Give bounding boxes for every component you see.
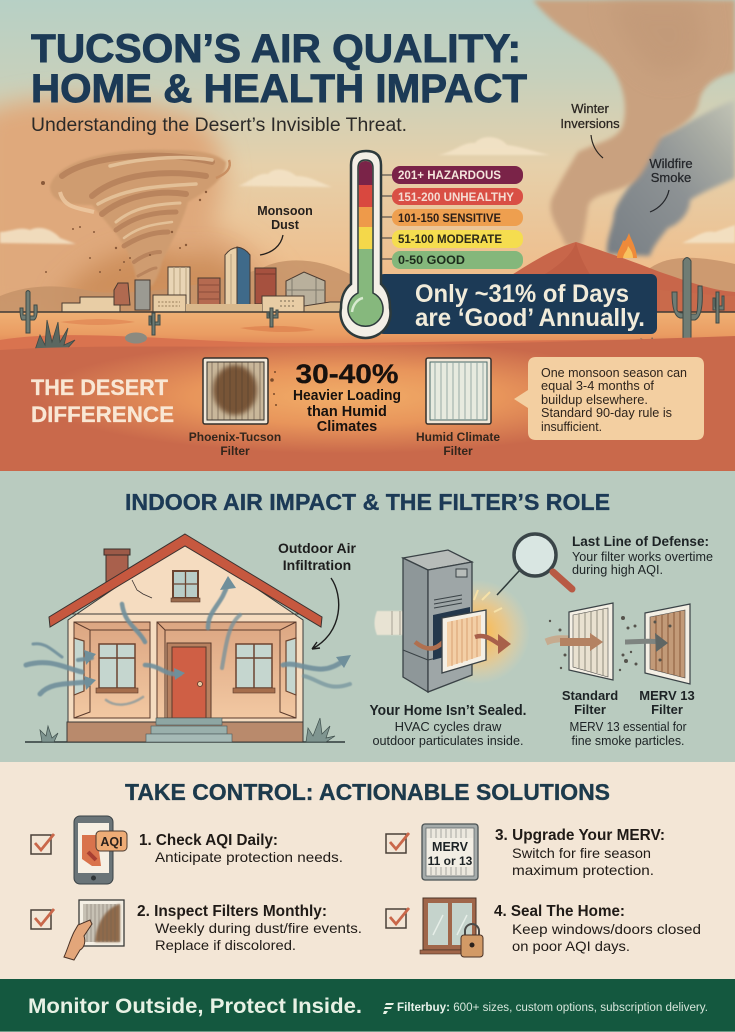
- text: last line of defense: Last Line of Defense:: [572, 533, 709, 549]
- text: upgrade your MERV: [495, 827, 665, 878]
- text: your home isn't sealed: Your Home Isn’t Sealed.: [370, 703, 526, 719]
- icon: MERV filter: 11 or 13: [428, 854, 473, 868]
- stat: 30-40% heavier loading: than Humid: [307, 404, 387, 420]
- panel: take control: [0, 762, 735, 979]
- callout: monsoon season note: buildup elsewhere.: [541, 393, 648, 407]
- label: humid climate filter: Humid Climate: [416, 430, 500, 444]
- label: Phoenix-Tucson filter: [189, 430, 281, 458]
- AQI band: unhealthy: 151-200 UNHEALTHY: [398, 190, 514, 204]
- text: upgrade your MERV: 3. Upgrade Your MERV:: [495, 827, 665, 844]
- solution 4: seal the home: [386, 898, 701, 957]
- AQI scale legend: [392, 166, 523, 269]
- horizon line: [0, 311, 735, 313]
- sky clouds: [0, 137, 735, 244]
- solution 1: check AQI daily: [31, 816, 343, 884]
- footer brand note: Filterbuy: 600+ sizes, custom options, subscription delivery.: [397, 1002, 708, 1014]
- heading: the desert difference: DIFFERENCE: [31, 402, 174, 427]
- text: seal the home: [494, 903, 701, 954]
- text: inspect filters monthly: Replace if discolored.: [155, 937, 296, 953]
- porch windows: [99, 644, 272, 688]
- label: outdoor air infiltration: [278, 540, 357, 649]
- label: wildfire smoke: Smoke: [651, 170, 691, 185]
- stat: 30-40% heavier loading: 30-40%: [296, 359, 398, 389]
- stat: 30-40% heavier loading: Heavier Loading: [293, 388, 401, 404]
- stat: 30-40% heavier loading: [293, 359, 401, 435]
- text: inspect filters monthly: 2. Inspect Filters Monthly:: [137, 903, 327, 920]
- text: your home isn't sealed: outdoor particulates inside.: [372, 733, 524, 748]
- icon: hand holding dirty filter: [64, 900, 124, 960]
- grass: [40, 718, 335, 742]
- stat: 30-40% heavier loading: Climates: [317, 419, 377, 435]
- side windows: [74, 638, 296, 695]
- red mountain: [488, 242, 735, 320]
- label: winter inversions: Inversions: [560, 116, 620, 131]
- icon: magnifying glass: [497, 534, 572, 595]
- label: standard filter: Standard: [562, 688, 618, 703]
- heading: the desert difference: [31, 375, 174, 427]
- label: Phoenix-Tucson filter: Filter: [220, 444, 250, 458]
- solution 2: inspect filters monthly: [31, 900, 362, 960]
- text: last line of defense: [572, 533, 713, 577]
- label: wildfire smoke: Wildfire: [649, 156, 693, 171]
- callout: monsoon season note: equal 3-4 months of: [541, 379, 655, 393]
- footer tagline: Monitor Outside, Protect Inside.: [28, 995, 362, 1018]
- label: MERV 13 filter: [639, 688, 695, 717]
- text: check AQI daily: [139, 832, 343, 865]
- text: check AQI daily: 1. Check AQI Daily:: [139, 832, 278, 849]
- callout: percent of good days: are ‘Good’ Annually.: [415, 304, 645, 332]
- checkbox 3: [386, 833, 409, 853]
- solution 3: upgrade your MERV: [386, 824, 665, 880]
- icon: phone with AQI map: AQI: [100, 835, 123, 849]
- icon: dirty Phoenix-Tucson filter: [203, 358, 277, 424]
- subtitle: Understanding the Desert’s Invisible Threat.: [31, 115, 407, 136]
- icon: MERV filter: MERV: [432, 840, 469, 854]
- label: standard filter: [562, 688, 618, 717]
- tornado: [50, 150, 230, 286]
- icon: clean humid climate filter: [426, 358, 491, 424]
- illustration: standard vs MERV 13 filters: [546, 603, 690, 684]
- text: MERV 13 essential: [570, 719, 687, 748]
- label: winter inversions: [560, 101, 620, 158]
- AQI band: good: 0-50 GOOD: [398, 253, 465, 267]
- callout: monsoon season note: One monsoon season can: [541, 366, 687, 380]
- checkbox 2: [31, 909, 54, 929]
- text: MERV 13 essential: fine smoke particles.: [572, 733, 684, 748]
- illustration: HVAC unit and filter: [374, 550, 530, 692]
- panel: indoor air impact: [0, 471, 735, 762]
- label: outdoor air infiltration: Outdoor Air: [278, 540, 357, 556]
- roof: [49, 534, 322, 627]
- icon: Filterbuy logo: [383, 1003, 394, 1014]
- label: MERV 13 filter: MERV 13: [639, 688, 695, 703]
- AQI band: hazardous: 201+ HAZARDOUS: [398, 168, 501, 182]
- gable window: [173, 571, 198, 598]
- text: your home isn't sealed: HVAC cycles draw: [395, 719, 502, 734]
- icon: MERV filter: [422, 824, 478, 880]
- label: humid climate filter: Filter: [443, 444, 473, 458]
- door: [167, 643, 211, 718]
- heading: indoor air impact: INDOOR AIR IMPACT & THE FILTER’S ROLE: [125, 489, 610, 515]
- text: your home isn't sealed: [370, 703, 526, 748]
- checkbox 4: [386, 908, 409, 928]
- heading: the desert difference: THE DESERT: [31, 375, 168, 400]
- text: MERV 13 essential: MERV 13 essential for: [570, 719, 687, 734]
- clouds over the haze: [0, 228, 76, 244]
- label: standard filter: Filter: [574, 702, 606, 717]
- text: check AQI daily: Anticipate protection needs.: [155, 849, 343, 865]
- text: seal the home: Keep windows/doors closed: [512, 921, 701, 937]
- label: monsoon dust: Dust: [271, 218, 300, 232]
- text: inspect filters monthly: Weekly during dust/fire events.: [155, 920, 362, 936]
- footer bar: [0, 979, 735, 1032]
- tan plume: [533, 0, 735, 246]
- text: upgrade your MERV: maximum protection.: [512, 862, 654, 878]
- AQI thermometer: [340, 151, 392, 338]
- AQI band: moderate: 51-100 MODERATE: [398, 232, 502, 246]
- callout: monsoon season note: insufficient.: [541, 420, 602, 434]
- ground: [0, 312, 735, 350]
- checkbox 1: [31, 834, 54, 854]
- callout: monsoon season note: [514, 357, 704, 440]
- text: upgrade your MERV: Switch for fire season: [512, 845, 651, 861]
- icon: locked window: [420, 898, 483, 957]
- label: wildfire smoke: [649, 156, 693, 212]
- title: TUCSON’S AIR QUALITY:: [31, 27, 521, 71]
- heading: take control: TAKE CONTROL: ACTIONABLE SOLUTIONS: [125, 779, 610, 805]
- callout: percent of good days: Only ~31% of Days: [415, 280, 629, 308]
- label: MERV 13 filter: Filter: [651, 702, 683, 717]
- AQI band: sensitive: 101-150 SENSITIVE: [398, 211, 501, 225]
- Tucson skyline: [62, 247, 345, 312]
- dust particles: [41, 181, 207, 273]
- text: seal the home: 4. Seal The Home:: [494, 903, 625, 920]
- text: inspect filters monthly: [137, 903, 362, 953]
- label: monsoon dust: [257, 204, 313, 255]
- callout: monsoon season note: Standard 90-day rule is: [541, 406, 672, 420]
- wildfire smoke plume: [607, 100, 735, 256]
- label: humid climate filter: [416, 430, 500, 458]
- callout: percent of good days: [378, 274, 657, 334]
- illustration: house with air infiltration: [25, 534, 345, 742]
- title: HOME & HEALTH IMPACT: [31, 67, 527, 111]
- panel: desert hero scene: [0, 0, 735, 350]
- text: seal the home: on poor AQI days.: [512, 938, 630, 954]
- fire: [617, 233, 637, 258]
- cacti and agave: [20, 258, 724, 346]
- wind arrows: air infiltration: [26, 583, 350, 705]
- panel: the desert difference: [0, 336, 735, 471]
- steps: [156, 718, 222, 725]
- label: outdoor air infiltration: Infiltration: [283, 557, 351, 573]
- icon: phone with AQI map: [74, 816, 127, 884]
- label: monsoon dust: Monsoon: [257, 204, 313, 218]
- label: winter inversions: Winter: [571, 101, 609, 116]
- monsoon dust haze: [0, 99, 295, 315]
- text: last line of defense: during high AQI.: [572, 562, 663, 577]
- far mountains: [0, 260, 352, 312]
- label: Phoenix-Tucson filter: Phoenix-Tucson: [189, 430, 281, 444]
- text: last line of defense: Your filter works overtime: [572, 549, 713, 564]
- title: [31, 27, 527, 111]
